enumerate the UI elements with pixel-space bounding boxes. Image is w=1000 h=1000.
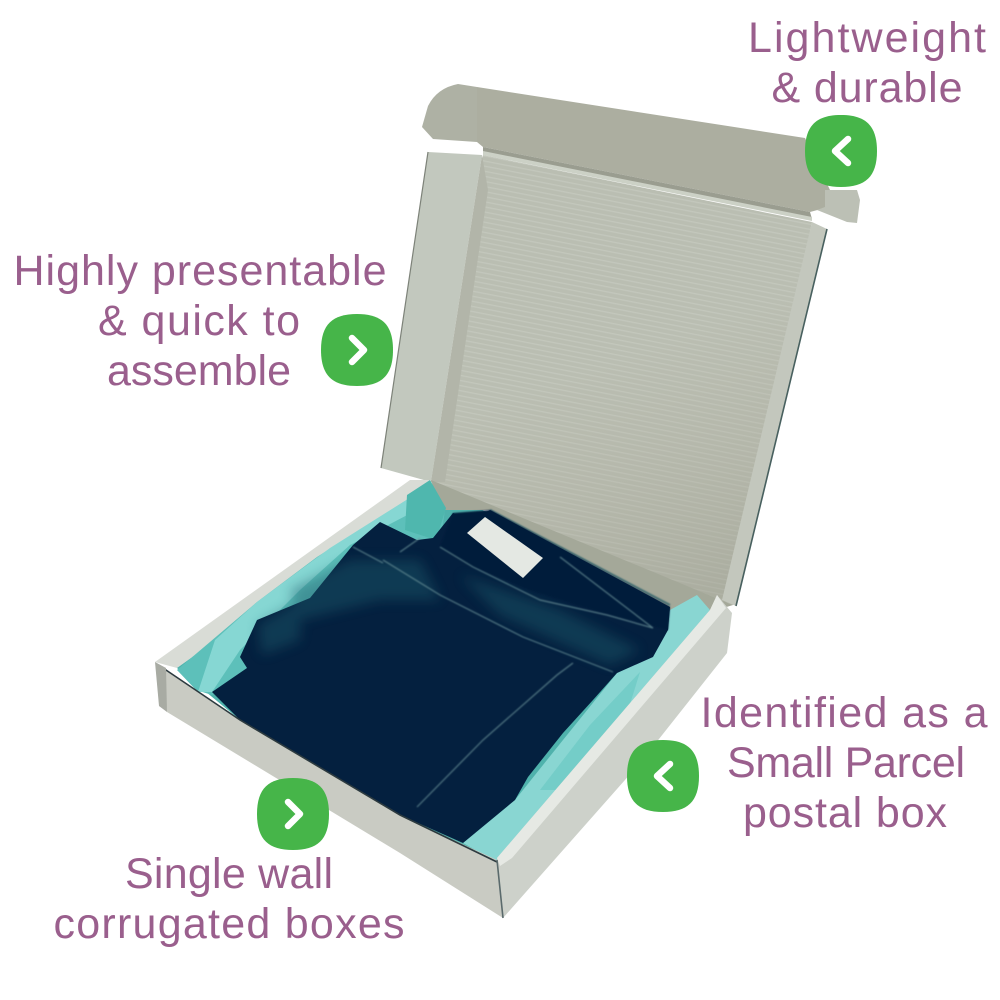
callout: lightweight and durable <box>748 14 986 187</box>
jeans stitching <box>353 538 653 807</box>
lid crease <box>483 147 812 219</box>
callout: highly presentable: & quick to <box>98 297 300 345</box>
box lid top flap <box>477 87 830 212</box>
lid right flap <box>722 222 827 606</box>
callout: single wall corrugated: corrugated boxes <box>54 900 404 948</box>
jeans dark back panel <box>440 510 670 630</box>
callout: identified as small parcel: Small Parcel <box>727 739 965 787</box>
callout: single wall corrugated: Single wall <box>125 850 333 898</box>
lid right ear <box>817 190 860 223</box>
tissue light fold left <box>198 487 436 692</box>
icon: left chevron <box>805 115 877 187</box>
callout: highly presentable <box>14 247 393 395</box>
front wall <box>163 668 503 918</box>
lid left ear <box>422 84 477 142</box>
box back wall inside <box>431 480 733 612</box>
callout: identified as small parcel: postal box <box>743 789 948 837</box>
callout: highly presentable: assemble <box>107 347 291 395</box>
icon: right chevron <box>321 314 393 386</box>
box interior floor <box>177 487 710 862</box>
icon: right chevron <box>257 778 329 850</box>
tissue paper right <box>463 595 710 862</box>
lid inner panel <box>431 155 812 605</box>
jeans highlights <box>258 560 640 665</box>
callout: lightweight and durable: Lightweight <box>748 14 986 62</box>
jeans <box>212 510 670 843</box>
right wall <box>497 595 732 918</box>
callout: identified as small parcel: Identified as a <box>700 689 988 737</box>
jeans label <box>467 517 543 578</box>
tissue paper base <box>177 487 445 695</box>
tissue back dark patch <box>405 480 446 540</box>
callout: identified as small parcel <box>627 689 988 837</box>
box rim left-back <box>155 480 431 668</box>
open postal box with jeans <box>155 84 860 918</box>
callout: single wall corrugated <box>54 778 404 948</box>
callout: highly presentable: Highly presentable <box>14 247 386 295</box>
callout: lightweight and durable: & durable <box>772 64 962 112</box>
icon: left chevron <box>627 740 699 812</box>
lid left flap <box>381 152 482 482</box>
left corner tab <box>155 662 167 712</box>
right wall highlight strip <box>497 595 726 866</box>
